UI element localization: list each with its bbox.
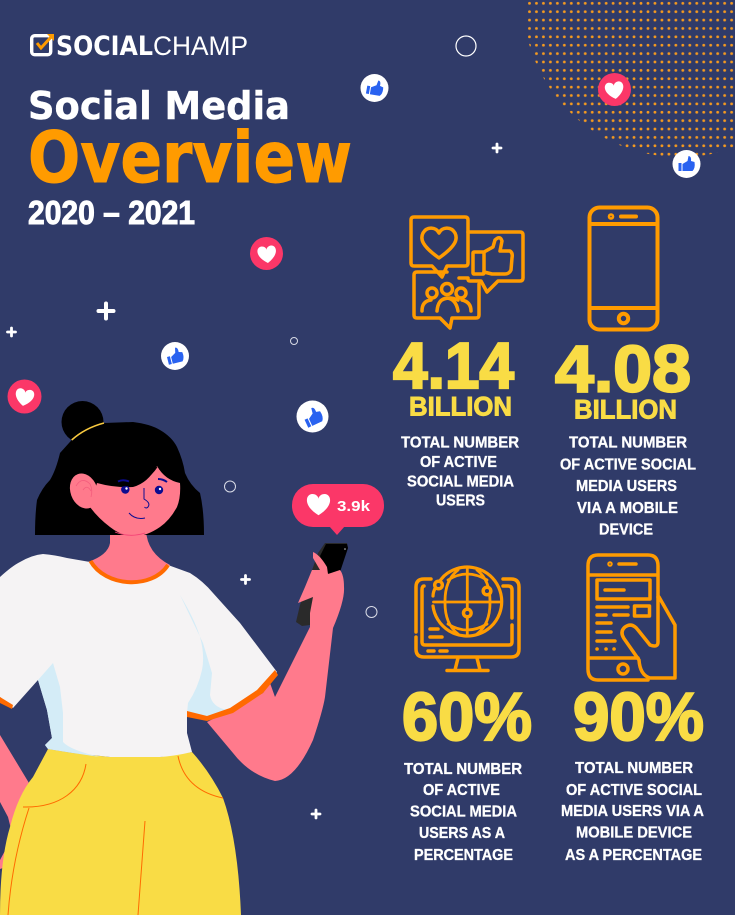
icon: globe on monitor [416, 567, 519, 670]
icon: heart badge left [8, 380, 42, 414]
stat: 4.08 billion mobile users: 4.08 [555, 332, 691, 406]
title: Social Media [28, 84, 290, 128]
stat: 4.08 billion mobile users: VIA A MOBILE [577, 500, 678, 517]
icon: hand holding phone [588, 555, 675, 680]
stat: 4.08 billion mobile users [555, 332, 696, 538]
icon: like badge near head [296, 400, 328, 432]
stat: 4.08 billion mobile users: OF ACTIVE SOCIAL [560, 456, 696, 473]
stat: 90 percent: MOBILE DEVICE [576, 825, 692, 842]
illustration: woman holding phone [0, 401, 348, 915]
decorative sparkles: rings and plus signs [8, 36, 501, 818]
facial features [115, 467, 167, 535]
stat: 90 percent: TOTAL NUMBER [575, 760, 693, 777]
icon: heart badge middle [250, 237, 283, 270]
face [90, 466, 180, 537]
stat: 90 percent: 90% [573, 679, 704, 755]
stat: 60 percent: SOCIAL MEDIA [410, 804, 517, 821]
ear [65, 469, 103, 513]
icon: heart badge top right [598, 73, 631, 106]
stat: 4.08 billion mobile users: BILLION [574, 394, 677, 424]
like counter bubble: 3.9k [337, 498, 371, 515]
back hand [0, 735, 32, 869]
stat: 4.14 billion users: USERS [436, 493, 485, 510]
title: Overview [28, 117, 352, 199]
stat: 60 percent: PERCENTAGE [414, 847, 513, 864]
stat: 60 percent: USERS AS A [419, 825, 505, 842]
raised arm and hand [207, 552, 344, 781]
icon: like badge left [161, 342, 189, 370]
bun [62, 401, 104, 443]
like counter bubble [292, 484, 384, 535]
icon: like badge top right [672, 150, 700, 178]
stat: 4.08 billion mobile users: TOTAL NUMBER [569, 435, 687, 452]
trousers [0, 749, 241, 915]
stat: 60 percent: TOTAL NUMBER [404, 761, 522, 778]
stat: 4.14 billion users: 4.14 [393, 329, 514, 402]
stat: 4.14 billion users: SOCIAL MEDIA [407, 474, 514, 491]
shirt trim [0, 670, 278, 721]
title [28, 84, 352, 231]
stat: 60 percent: OF ACTIVE [423, 782, 500, 799]
hairband [72, 423, 104, 440]
logo: Social Champ [32, 31, 248, 62]
dotted halftone circle [525, 0, 735, 165]
stat: 4.14 billion users: TOTAL NUMBER [401, 435, 519, 452]
stat: 4.14 billion users: BILLION [409, 392, 512, 422]
stat: 4.08 billion mobile users: DEVICE [599, 521, 653, 538]
stat: 90 percent: OF ACTIVE SOCIAL [566, 782, 702, 799]
stat: 4.08 billion mobile users: MEDIA USERS [576, 478, 677, 495]
collar [90, 561, 168, 582]
stat: 60 percent [402, 679, 532, 864]
stat: 90 percent: AS A PERCENTAGE [565, 847, 702, 864]
logo: Social Champ: SOCIAL [56, 31, 153, 62]
stat: 60 percent: 60% [402, 679, 532, 755]
stat: 90 percent [561, 679, 704, 864]
title: 2020 – 2021 [28, 194, 195, 231]
icon: smartphone [590, 208, 658, 330]
shirt shading [38, 595, 227, 757]
stat: 90 percent: MEDIA USERS VIA A [561, 803, 704, 820]
neck [88, 520, 170, 592]
stat: 4.14 billion users [393, 329, 519, 510]
stat: 4.14 billion users: OF ACTIVE [420, 454, 497, 471]
phone [296, 543, 348, 626]
hair [35, 422, 204, 535]
T-shirt [0, 554, 277, 757]
logo: Social Champ: CHAMP [153, 31, 248, 61]
icon: like badge near title [360, 74, 388, 102]
icon: social speech bubbles [411, 217, 523, 328]
